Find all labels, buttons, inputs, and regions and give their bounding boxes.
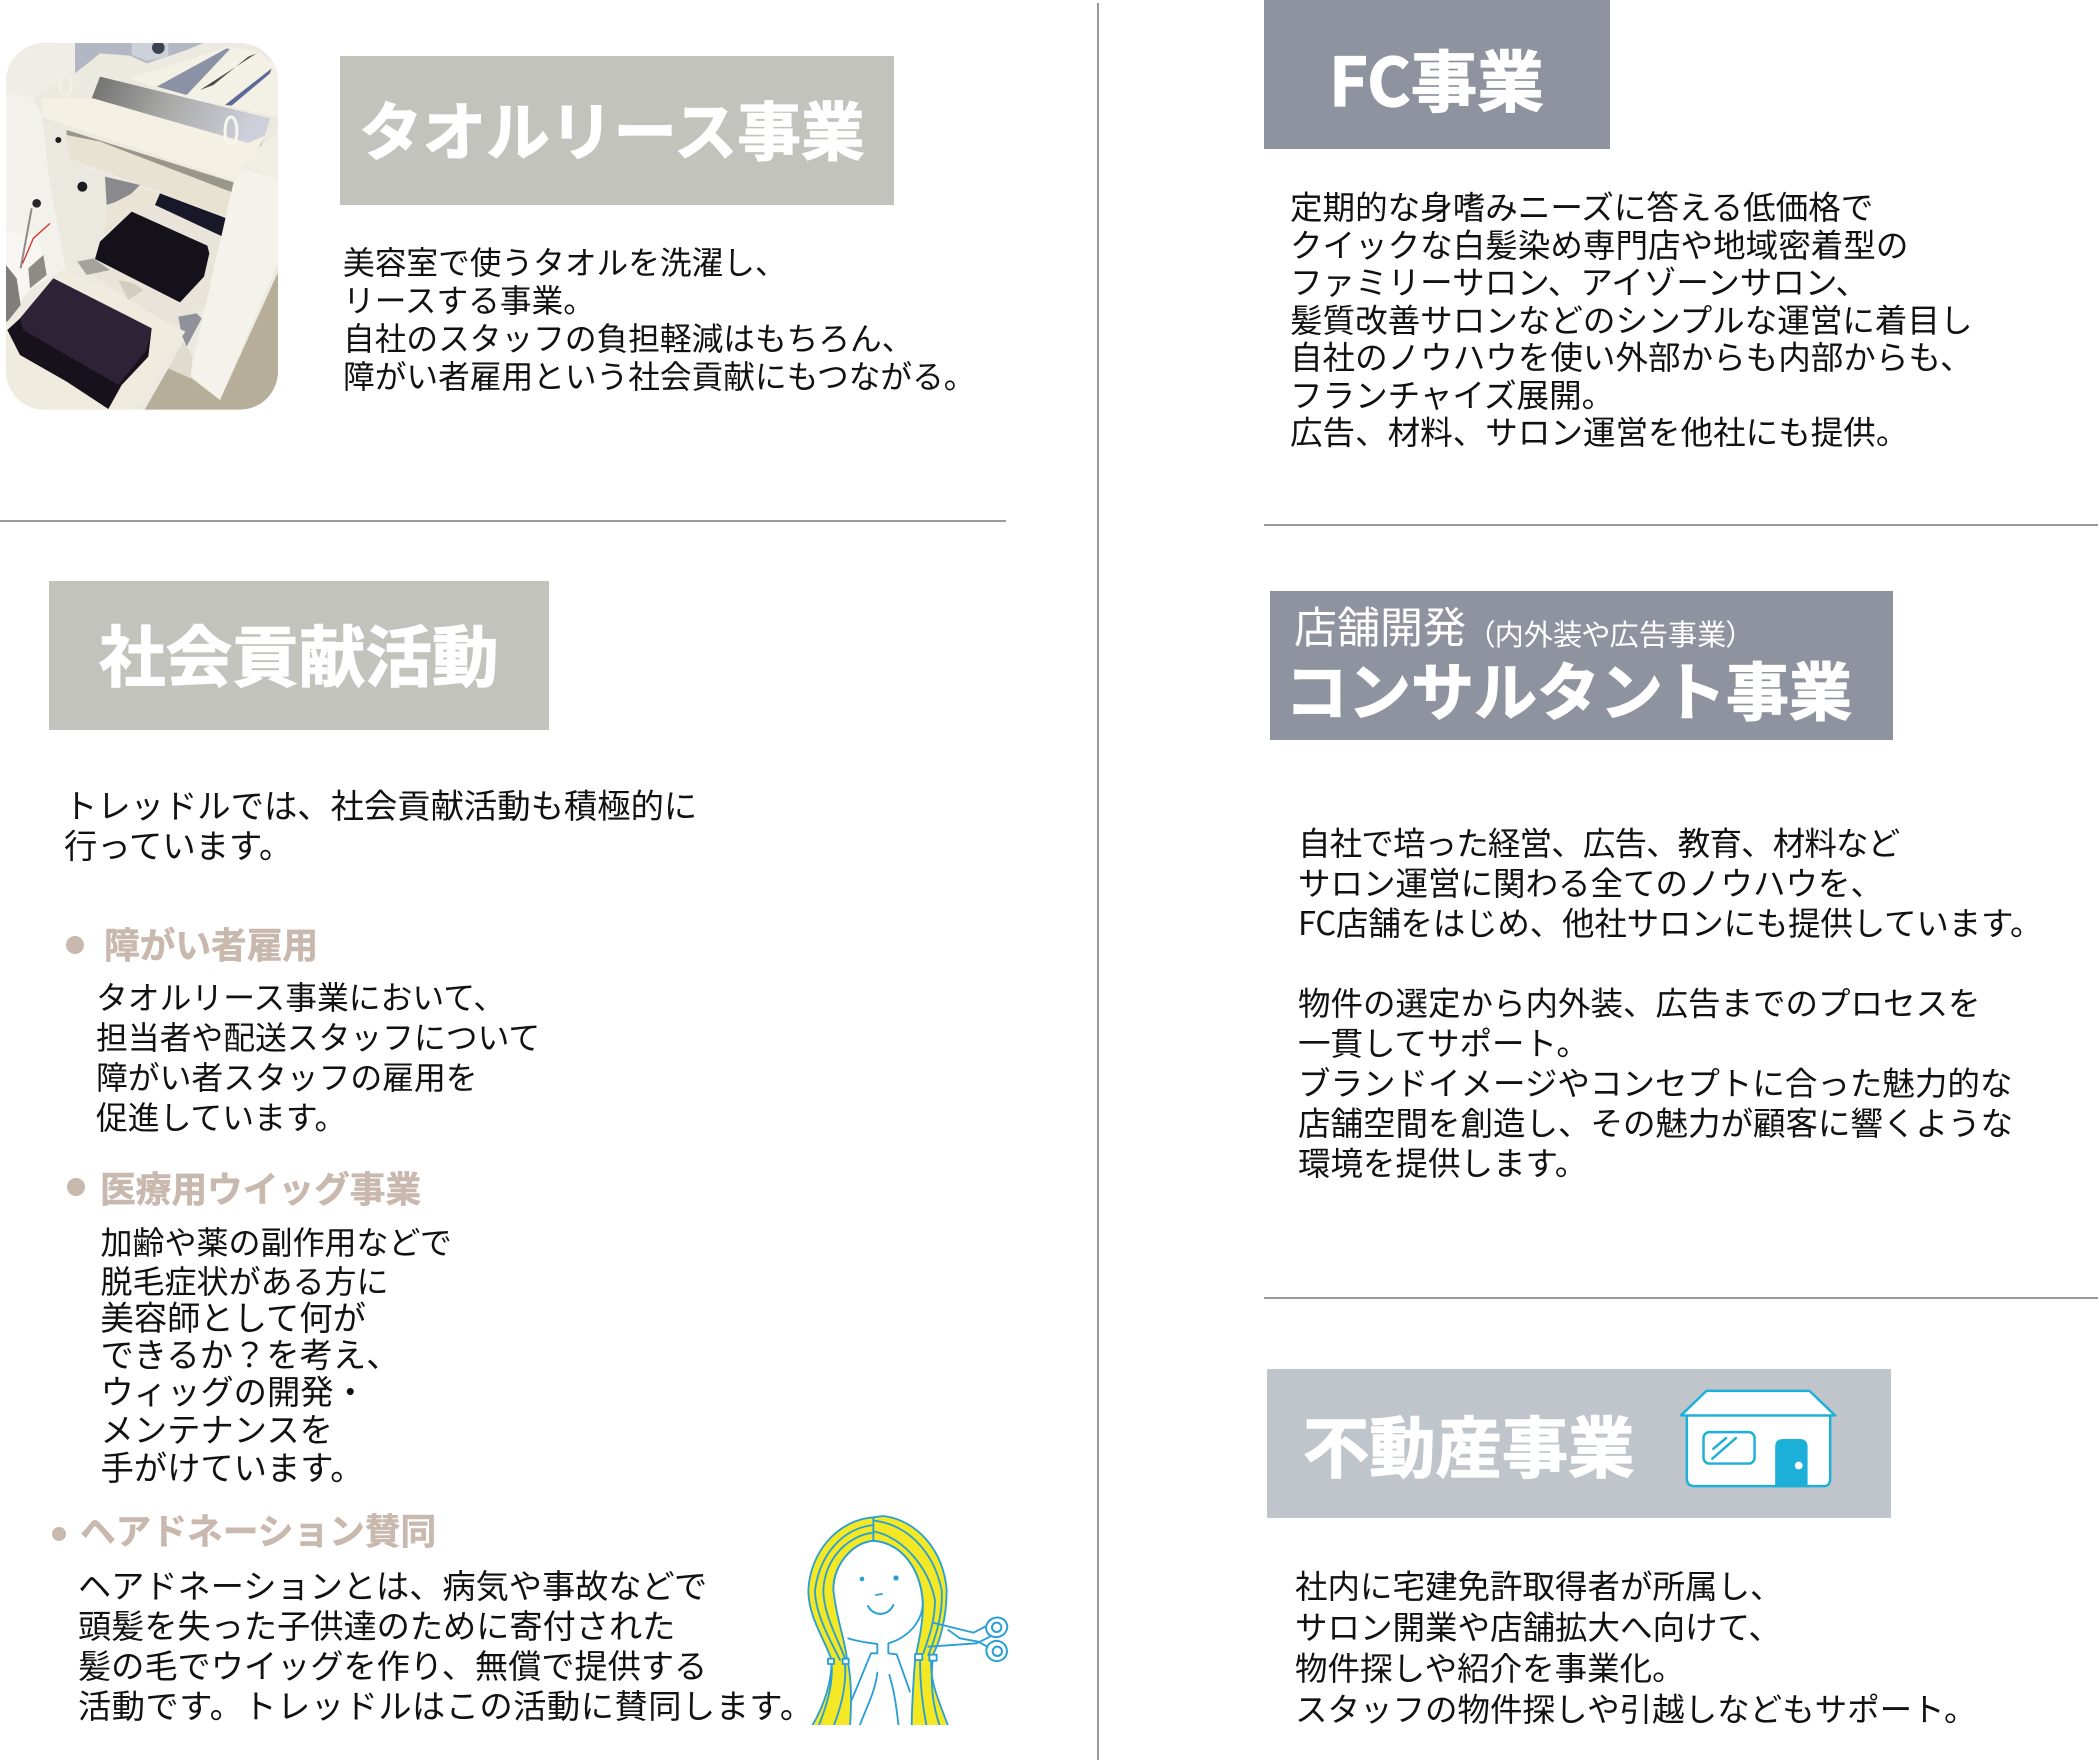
- divider: left column: [0, 520, 1006, 522]
- text: consulting description: ブランドイメージやコンセプトに合った魅力的な: [1298, 1058, 2012, 1105]
- text: employment: [96, 972, 540, 1139]
- text: intro: トレッドルでは、社会貢献活動も積極的に: [64, 778, 697, 828]
- text: towel lease description: リースする事業。: [343, 276, 595, 322]
- text: FC description: 自社のノウハウを使い外部からも内部からも、: [1290, 332, 1973, 379]
- text: intro: 行っています。: [64, 818, 292, 868]
- icon: house: [1680, 1390, 1836, 1488]
- bullet: hair donation: [52, 1527, 66, 1541]
- text: wigs: 脱毛症状がある方に: [100, 1257, 389, 1303]
- text: real estate description: 物件探しや紹介を事業化。: [1295, 1643, 1685, 1690]
- text: hair donation: 頭髪を失った子供達のために寄付された: [78, 1598, 675, 1648]
- text: towel lease description: 美容室で使うタオルを洗濯し、: [343, 238, 787, 284]
- panel: social contribution: [49, 581, 814, 1728]
- text: wigs: 手がけています。: [100, 1441, 364, 1490]
- photo: towel machine: [6, 43, 278, 410]
- text: towel lease description: 自社のスタッフの負担軽減はもちろん、: [343, 314, 913, 360]
- panel: real estate: [1267, 1369, 1977, 1731]
- panel: consulting: [1270, 591, 2042, 1185]
- text: FC description: 髪質改善サロンなどのシンプルな運営に着目し: [1290, 294, 1973, 342]
- text: consulting description: 物件の選定から内外装、広告までのプロセスを: [1298, 978, 1981, 1025]
- bullet: wigs: [67, 1178, 85, 1196]
- text: real estate description: サロン開業や店舗拡大へ向けて、: [1295, 1602, 1781, 1649]
- text: consulting description: 自社で培った経営、広告、教育、材料など: [1298, 818, 1899, 865]
- text: hair donation: 髪の毛でウイッグを作り、無償で提供する: [78, 1638, 707, 1688]
- text: consulting description: 環境を提供します。: [1298, 1138, 1587, 1185]
- text: employment: 担当者や配送スタッフについて: [96, 1013, 540, 1059]
- heading: towel lease: [340, 56, 894, 205]
- text: employment: 促進しています。: [96, 1093, 346, 1139]
- icon: girl with scissors: [807, 1515, 1008, 1725]
- text: consulting description: 一貫してサポート。: [1298, 1018, 1589, 1065]
- panel: FC business: [1264, 0, 1973, 454]
- text: hair donation: ヘアドネーションとは、病気や事故などで: [78, 1558, 707, 1608]
- text: FC description: 定期的な身嗜みニーズに答える低価格で: [1290, 182, 1873, 229]
- heading text: 社会貢献活動: [99, 605, 499, 701]
- subheading: hair donation: ヘアドネーション賛同: [80, 1504, 436, 1554]
- heading text: タオルリース事業: [359, 82, 865, 174]
- text: hair donation: [78, 1558, 814, 1728]
- text: employment: 障がい者スタッフの雇用を: [96, 1053, 478, 1099]
- text: towel lease description: 障がい者雇用という社会貢献にもつながる。: [343, 352, 975, 398]
- text: employment: タオルリース事業において、: [96, 972, 505, 1018]
- bullet: employment: [66, 936, 84, 954]
- text: towel lease description: [343, 238, 975, 398]
- heading: FC business: [1264, 0, 1610, 149]
- divider: vertical centre: [1097, 3, 1099, 1760]
- divider: right column lower: [1264, 1296, 2098, 1298]
- heading: real estate: [1267, 1369, 1891, 1518]
- subheading: employment: 障がい者雇用: [104, 918, 318, 968]
- text: real estate description: [1295, 1560, 1977, 1731]
- panel: towel lease: [340, 56, 975, 398]
- text: real estate description: スタッフの物件探しや引越しなどもサポート。: [1295, 1684, 1977, 1731]
- text: consulting description: [1298, 818, 2042, 1185]
- heading subtitle: 店舗開発 （内外装や広告事業）: [1294, 594, 1741, 656]
- divider: right column upper: [1264, 524, 2098, 526]
- text: wigs: 加齢や薬の副作用などで: [100, 1218, 452, 1264]
- text: consulting description: サロン運営に関わる全てのノウハウを、: [1298, 858, 1883, 905]
- heading text: コンサルタント事業: [1285, 643, 1852, 734]
- subheading: wigs: 医療用ウイッグ事業: [100, 1162, 421, 1212]
- text: hair donation: 活動です。トレッドルはこの活動に賛同します。: [78, 1678, 814, 1728]
- heading: social contribution: [49, 581, 549, 730]
- text: wigs: [100, 1218, 452, 1490]
- text: intro: [64, 778, 697, 868]
- text: real estate description: 社内に宅建免許取得者が所属し、: [1295, 1560, 1783, 1608]
- heading text: FC事業: [1329, 30, 1544, 126]
- text: consulting description: 店舗空間を創造し、その魅力が顧客に響くような: [1298, 1098, 2013, 1145]
- heading text: 不動産事業: [1303, 1396, 1634, 1492]
- text: FC description: クイックな白髪染め専門店や地域密着型の: [1290, 220, 1908, 266]
- text: wigs: 美容師として何が: [100, 1290, 366, 1340]
- heading: consulting: [1270, 591, 1893, 740]
- text: FC description: 広告、材料、サロン運営を他社にも提供。: [1290, 407, 1908, 454]
- text: wigs: できるか？を考え、: [100, 1328, 400, 1377]
- text: wigs: メンテナンスを: [100, 1403, 333, 1452]
- text: wigs: ウィッグの開発・: [100, 1365, 367, 1414]
- text: consulting description: FC店舗をはじめ、他社サロンにも提供しています。: [1298, 898, 2042, 945]
- text: FC description: ファミリーサロン、アイゾーンサロン、: [1290, 257, 1868, 304]
- text: FC description: フランチャイズ展開。: [1290, 370, 1614, 416]
- text: FC description: [1290, 182, 1973, 454]
